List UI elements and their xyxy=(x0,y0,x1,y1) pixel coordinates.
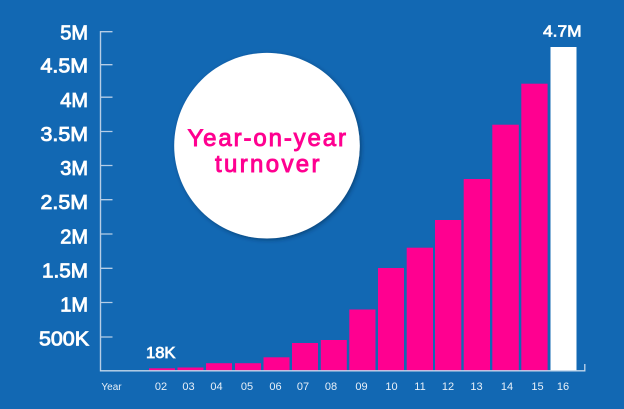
title text: Year-on-year xyxy=(188,125,346,152)
x axis labels: 13 xyxy=(470,381,483,393)
y axis labels: 2M xyxy=(60,226,88,248)
bars: turnover per year xyxy=(149,84,548,371)
title text xyxy=(188,125,346,178)
x axis labels: 03 xyxy=(182,381,195,393)
x axis labels: 02 xyxy=(155,381,167,393)
title circle xyxy=(174,53,360,238)
value label: 18K: 18K xyxy=(146,345,176,362)
x axis labels: 16 xyxy=(557,381,569,393)
x axis labels: 15 xyxy=(531,381,544,393)
x axis xyxy=(100,364,585,371)
y axis labels: 2.5M xyxy=(40,192,88,214)
title text: turnover xyxy=(215,151,320,178)
x axis labels: 06 xyxy=(269,381,282,393)
y axis labels: 5M xyxy=(60,22,88,44)
x axis labels: 08 xyxy=(325,381,337,393)
y axis labels xyxy=(39,22,90,350)
x axis labels: 05 xyxy=(241,381,253,393)
y axis labels: 1M xyxy=(60,294,88,316)
y axis labels: 4.5M xyxy=(40,56,88,78)
x axis labels: 14 xyxy=(501,381,513,393)
x axis labels: 10 xyxy=(385,381,398,393)
y axis labels: 3.5M xyxy=(40,124,88,146)
value label: 4.7M: 4.7M xyxy=(543,24,582,40)
x axis labels: Year xyxy=(101,382,122,393)
highlighted bar: 2016 xyxy=(550,47,576,371)
x axis labels: 11 xyxy=(414,381,426,393)
x axis labels xyxy=(101,381,569,393)
y axis labels: 3M xyxy=(60,158,88,180)
y axis labels: 1.5M xyxy=(42,260,88,282)
x axis labels: 12 xyxy=(442,381,454,393)
y axis labels: 4M xyxy=(60,90,88,112)
x axis labels: 04 xyxy=(210,381,223,393)
y axis with ticks xyxy=(100,31,112,372)
y axis labels: 500K xyxy=(39,328,90,350)
x axis labels: 09 xyxy=(355,381,368,393)
x axis labels: 07 xyxy=(297,381,309,393)
